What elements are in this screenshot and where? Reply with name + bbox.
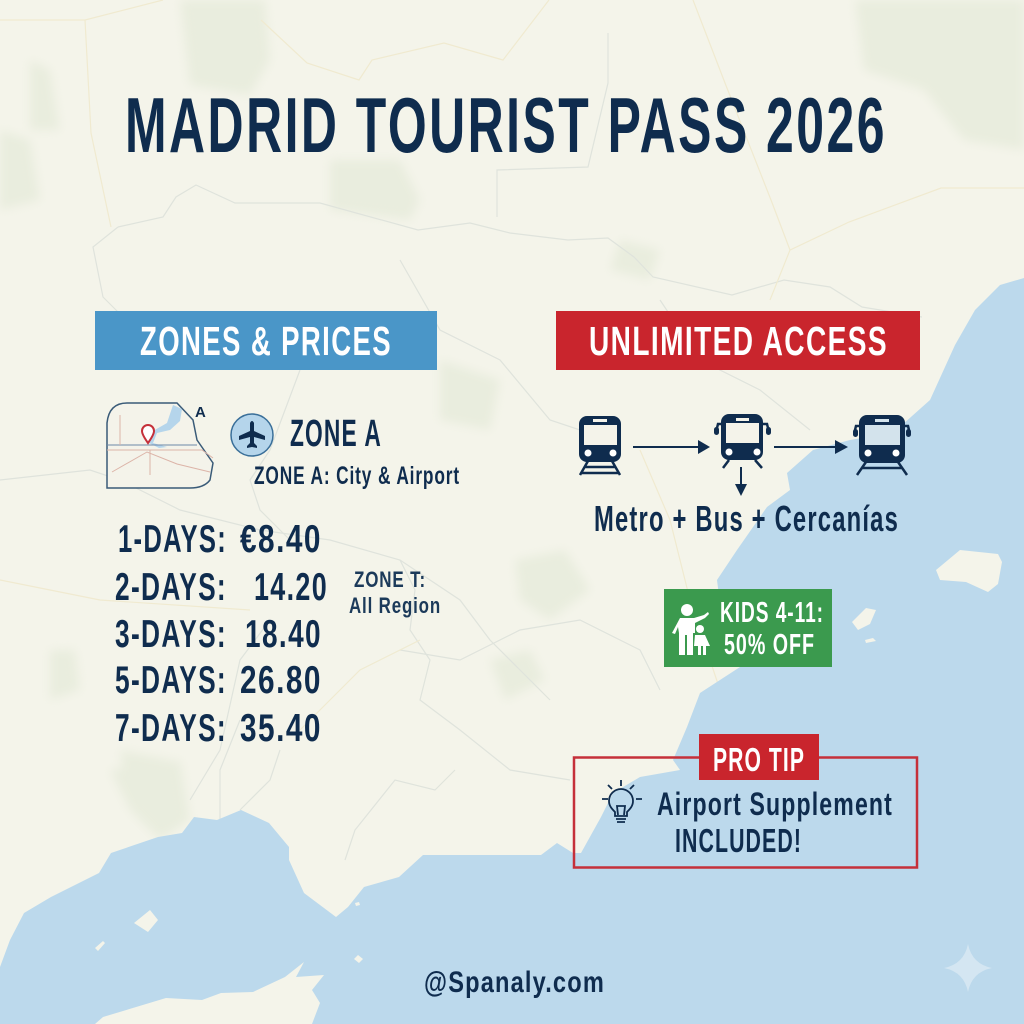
icon: bus [714, 414, 771, 468]
price list: 14.20 [254, 566, 328, 609]
price list: 35.40 [240, 707, 322, 750]
heading: unlimited access: UNLIMITED ACCESS [589, 318, 888, 364]
callout: pro tip: Airport Supplement [657, 786, 893, 822]
callout: pro tip: INCLUDED! [675, 822, 802, 859]
icon: airplane [231, 414, 273, 456]
icon: bus train [853, 415, 911, 475]
icon: adult and child [672, 604, 710, 655]
icon: zone map: A [195, 404, 207, 421]
pro tip tag [699, 734, 819, 780]
heading: zones and prices: ZONES & PRICES [140, 318, 392, 364]
price list [115, 518, 328, 750]
price list: 18.40 [245, 613, 322, 656]
zone T note [349, 567, 441, 618]
callout: kids discount: 50% OFF [724, 629, 815, 661]
price list: 5-DAYS: [115, 659, 227, 702]
price list: 3-DAYS: [115, 613, 227, 656]
arrow [774, 440, 848, 454]
footer handle: @Spanaly.com [424, 966, 605, 999]
callout: kids discount: KIDS 4-11: [720, 597, 824, 629]
icon: zone map [107, 403, 213, 488]
zone A description: ZONE A: City & Airport [254, 462, 460, 490]
arrow [735, 467, 747, 496]
heading: unlimited access [556, 311, 920, 370]
zone A heading: ZONE A [290, 413, 382, 455]
pro tip tag: PRO TIP [713, 741, 805, 778]
price list: €8.40 [240, 518, 322, 561]
callout: kids discount [664, 589, 832, 667]
price list: 1-DAYS: [118, 518, 227, 561]
sea [0, 278, 1024, 1024]
heading: zones and prices [95, 311, 437, 370]
price list: 2-DAYS: [115, 566, 227, 609]
zone T note: All Region [349, 593, 441, 618]
panel: zones and prices [95, 311, 460, 750]
icon: sparkle [944, 944, 992, 992]
arrow [633, 440, 710, 454]
icon: metro train [579, 416, 621, 475]
panel: unlimited access [556, 311, 920, 868]
icon: light bulb [602, 780, 642, 822]
price list: 26.80 [240, 659, 322, 702]
price list: 7-DAYS: [115, 707, 227, 750]
zone T note: ZONE T: [354, 567, 426, 592]
callout: pro tip [574, 734, 917, 868]
